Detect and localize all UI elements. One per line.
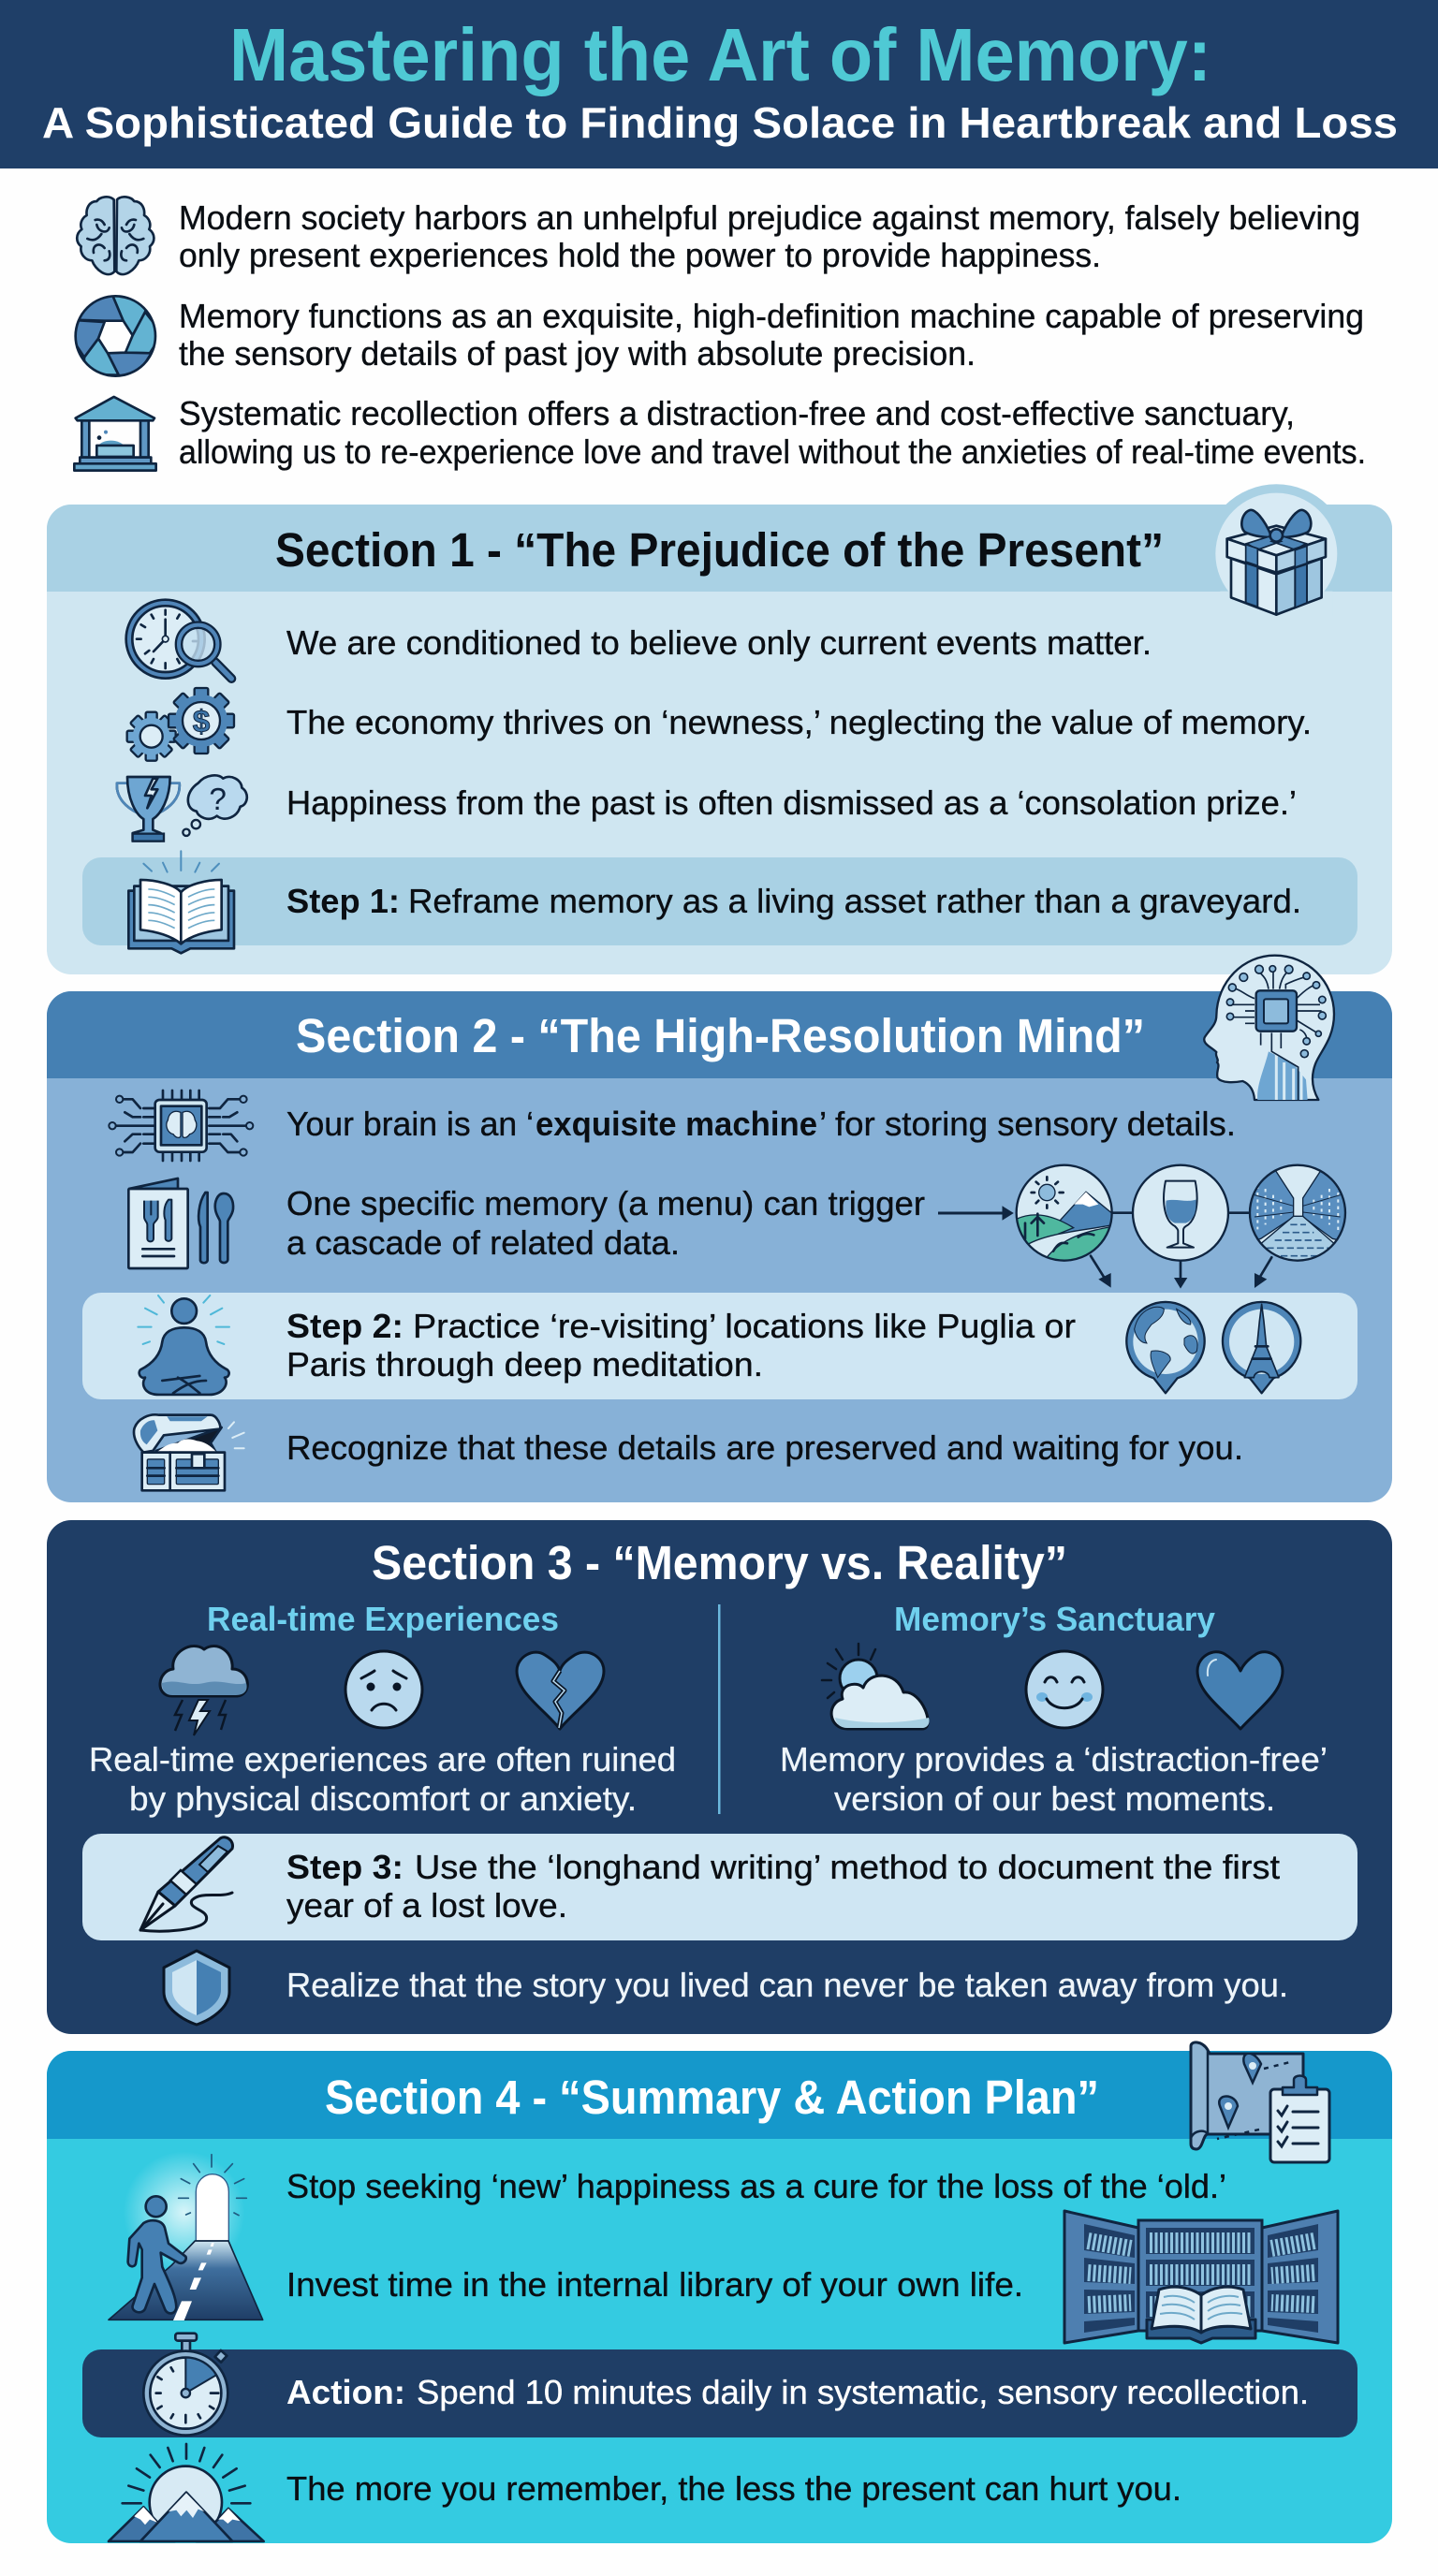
icon: eiffel pin	[1223, 1302, 1300, 1393]
icon: gift badge	[1215, 484, 1337, 616]
text row 2: One specific memory (a menu) can trigger	[286, 1184, 925, 1222]
section 4 body	[47, 2051, 1392, 2543]
section 4 heading: Section 4 - “Summary & Action Plan”	[325, 2071, 1099, 2124]
icon: library bookshelf	[1064, 2211, 1338, 2343]
icon: trophy and thought cloud	[117, 775, 247, 842]
step 1 bar	[82, 857, 1357, 945]
icon: trophy and thought cloud: ?	[209, 783, 227, 817]
icon: shield	[164, 1951, 229, 2025]
icon: brain chip	[109, 1090, 253, 1161]
column: real-time experiences: Real-time experiences are often ruined	[89, 1740, 676, 1778]
icon: happy face	[1026, 1651, 1103, 1728]
intro text 1: Modern society harbors an unhelpful prejudice against memory, falsely believing	[179, 198, 1360, 237]
text row: Realize that the story you lived can never be taken away from you.	[286, 1966, 1288, 2004]
text row 2	[286, 1184, 925, 1262]
icon: sad face	[345, 1651, 422, 1728]
intro text 2: Memory functions as an exquisite, high-definition machine capable of preserving	[179, 297, 1364, 335]
intro text 2: the sensory details of past joy with absolute precision.	[179, 334, 976, 373]
step 1 bar: Reframe memory as a living asset rather than a graveyard.	[408, 882, 1301, 920]
intro text 3	[179, 394, 1366, 471]
icon: clock and magnifier	[126, 600, 231, 679]
icon: gears with dollar: $	[193, 705, 211, 739]
text row 1: Stop seeking ‘new’ happiness as a cure for the loss of the ‘old.’	[286, 2167, 1226, 2205]
icon: broken heart	[517, 1652, 604, 1729]
text row 1	[286, 1105, 1236, 1143]
intro block	[68, 197, 1366, 471]
column: real-time experiences	[89, 1600, 676, 1818]
icon: gears with dollar	[127, 688, 234, 761]
column: memory sanctuary: Memory’s Sanctuary	[894, 1600, 1215, 1638]
text row 1: ’ for storing sensory details.	[819, 1105, 1236, 1143]
step 3 bar: year of a lost love.	[286, 1886, 567, 1925]
section 1 heading: Section 1 - “The Prejudice of the Present”	[275, 523, 1164, 577]
intro text 3: Systematic recollection offers a distraction-free and cost-effective sanctuary,	[179, 394, 1295, 432]
icon: fountain pen	[140, 1837, 233, 1931]
section 3 body	[47, 1520, 1392, 2034]
section 2 header bar	[47, 991, 1392, 1078]
panel: section 3	[47, 1520, 1392, 2034]
panel: section 2	[47, 956, 1392, 1502]
section 3 heading: Section 3 - “Memory vs. Reality”	[372, 1536, 1067, 1589]
text row 2: The economy thrives on ‘newness,’ neglecting the value of memory.	[286, 703, 1312, 741]
column: real-time experiences: Real-time Experiences	[207, 1600, 559, 1638]
step 2 bar: Practice ‘re-visiting’ locations like Puglia or	[413, 1307, 1076, 1345]
arrows: down to pins	[1091, 1256, 1271, 1289]
column: real-time experiences: by physical discomfort or anxiety.	[129, 1779, 637, 1818]
text row 1: We are conditioned to believe only current events matter.	[286, 623, 1152, 662]
text row 1: exquisite machine	[536, 1105, 817, 1143]
step 2 bar: Step 2:	[286, 1307, 404, 1345]
icon: treasure chest	[134, 1414, 244, 1490]
icon: memory cascade circles	[1014, 1165, 1346, 1264]
step 3 bar: Use the ‘longhand writing’ method to document the first	[415, 1848, 1280, 1886]
title: Mastering the Art of Memory:	[229, 13, 1211, 96]
text row 4: Recognize that these details are preserved and waiting for you.	[286, 1428, 1243, 1467]
step 3 bar	[82, 1834, 1357, 1940]
text row 3: The more you remember, the less the present can hurt you.	[286, 2469, 1181, 2508]
section 2 body	[47, 991, 1392, 1502]
intro text 2	[179, 297, 1364, 373]
step 3 bar: Step 3:	[286, 1848, 404, 1886]
step 2 bar	[82, 1293, 1357, 1399]
arrow: to landscape	[938, 1208, 1011, 1218]
text row 2: a cascade of related data.	[286, 1223, 680, 1262]
step 1 bar: Step 1:	[286, 882, 400, 920]
icon: temple sanctuary	[74, 397, 156, 471]
icon: open book with rays	[128, 851, 234, 953]
intro text 3: allowing us to re-experience love and travel without the anxieties of real-time events.	[179, 432, 1366, 471]
icon: brain	[77, 197, 154, 274]
column: memory sanctuary	[780, 1600, 1328, 1818]
icon: sun and cloud	[822, 1644, 930, 1729]
icon: camera aperture	[74, 295, 157, 377]
column divider	[718, 1604, 721, 1814]
text row 3: Happiness from the past is often dismissed as a ‘consolation prize.’	[286, 783, 1297, 822]
icon: sunrise over mountains	[109, 2444, 264, 2541]
intro text 1: only present experiences hold the power to provide happiness.	[179, 236, 1101, 274]
action bar: Action:	[286, 2373, 405, 2411]
section 4 header bar	[47, 2051, 1392, 2139]
column: memory sanctuary: version of our best moments.	[834, 1779, 1275, 1818]
subtitle: A Sophisticated Guide to Finding Solace in Heartbreak and Loss	[42, 98, 1398, 147]
panel: section 4	[47, 2042, 1392, 2543]
icon: stopwatch	[143, 2334, 227, 2436]
icon: globe pin	[1126, 1302, 1300, 1393]
text row 1: Your brain is an ‘	[286, 1105, 534, 1143]
icon: map and checklist	[1191, 2042, 1329, 2162]
section 1 header bar	[47, 505, 1392, 592]
action bar: Spend 10 minutes daily in systematic, sensory recollection.	[417, 2373, 1309, 2411]
intro text 1	[179, 198, 1360, 274]
action bar	[82, 2349, 1357, 2437]
icon: storm cloud	[160, 1647, 247, 1735]
section 2 heading: Section 2 - “The High-Resolution Mind”	[296, 1009, 1145, 1062]
icon: menu and cutlery	[128, 1178, 233, 1268]
text row 2: Invest time in the internal library of your own life.	[286, 2265, 1023, 2304]
step 2 bar: Paris through deep meditation.	[286, 1345, 763, 1383]
icon: heart	[1197, 1652, 1283, 1729]
section 1 body	[47, 505, 1392, 974]
panel: section 1	[47, 484, 1392, 974]
column: memory sanctuary: Memory provides a ‘distraction-free’	[780, 1740, 1328, 1778]
icon: meditating figure	[138, 1295, 229, 1395]
header banner	[0, 0, 1438, 168]
icon: head with circuit chip	[1204, 956, 1334, 1100]
icon: walker toward light	[109, 2151, 263, 2320]
